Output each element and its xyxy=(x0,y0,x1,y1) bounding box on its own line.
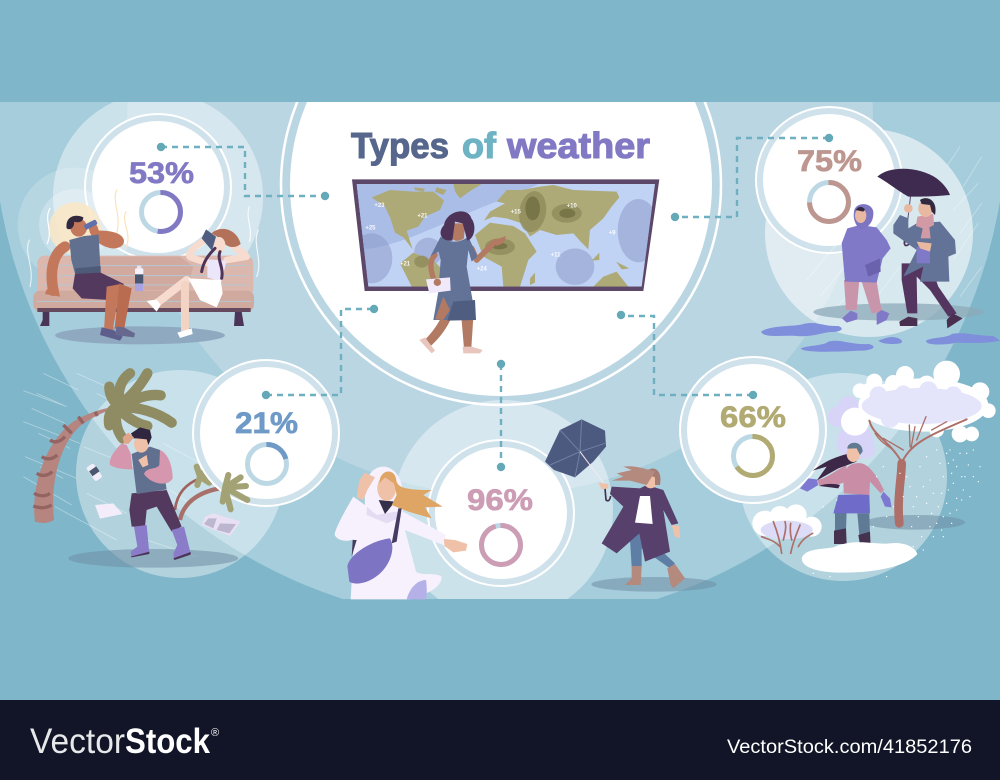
windblown bottle xyxy=(86,463,103,482)
pressure systems xyxy=(351,199,659,285)
map frame xyxy=(352,179,659,291)
map temperatures xyxy=(365,203,616,272)
small palm fronds over card xyxy=(223,475,247,509)
map temperatures: +21 xyxy=(400,261,411,267)
inverted umbrella xyxy=(545,419,611,501)
presenter xyxy=(419,211,506,353)
watermark logo: Vector xyxy=(30,722,125,761)
continents xyxy=(372,184,629,287)
snowy tree canopy xyxy=(828,361,996,460)
storm scene xyxy=(335,419,717,599)
blowing newspaper xyxy=(202,513,241,536)
card: 75 percent: 75% xyxy=(797,145,862,178)
title: weather xyxy=(506,125,650,166)
map temperatures: +25 xyxy=(365,226,376,232)
heat scene figures xyxy=(18,168,259,344)
ground shadow xyxy=(55,326,225,344)
title: of xyxy=(462,125,497,166)
water bottle xyxy=(135,266,143,291)
map temperatures: +21 xyxy=(417,213,428,219)
weather map with presenter xyxy=(340,177,673,353)
tree shadow xyxy=(865,515,965,530)
watermark logo xyxy=(30,722,219,761)
rain streaks xyxy=(807,147,982,310)
woman in white coat xyxy=(335,467,467,599)
ground shadow xyxy=(68,549,238,568)
ground shadow xyxy=(813,303,983,321)
watermark id: VectorStock.com/41852176 xyxy=(727,737,972,758)
man with umbrella xyxy=(877,169,963,328)
wind scene big palm xyxy=(23,373,241,568)
falling snow xyxy=(813,450,980,577)
watermark logo: ® xyxy=(211,727,219,739)
card: 21 percent xyxy=(193,360,339,506)
wind streaks xyxy=(23,373,207,557)
middle background layers xyxy=(0,102,1000,599)
girl in snow xyxy=(800,443,892,548)
card: 21 percent: 21% xyxy=(235,407,298,440)
card: 53 percent xyxy=(85,114,231,260)
snow mound xyxy=(802,542,917,573)
man in wind xyxy=(110,427,191,560)
map temperatures: +15 xyxy=(511,210,521,216)
dark land patches xyxy=(414,189,582,268)
woman with purple coat xyxy=(591,466,717,592)
connector lines xyxy=(161,138,829,467)
snowy bush xyxy=(752,504,822,553)
title: Types xyxy=(351,125,449,166)
tree trunk and branches xyxy=(869,417,967,523)
woman with book xyxy=(147,229,247,338)
map temperatures: +9 xyxy=(609,231,616,237)
watermark logo: Stock xyxy=(125,722,210,761)
heat glow around man xyxy=(18,168,132,282)
title xyxy=(351,125,650,166)
card: 96 percent: 96% xyxy=(467,484,533,517)
card: 66 percent: 66% xyxy=(720,401,786,434)
card: 75 percent xyxy=(756,107,902,253)
rain scene xyxy=(761,147,1000,352)
puddles xyxy=(761,323,1000,352)
heat steam xyxy=(28,190,259,287)
card: 53 percent: 53% xyxy=(129,157,194,190)
map surface xyxy=(356,184,655,287)
large palm tree xyxy=(33,373,172,523)
map temperatures: +11 xyxy=(551,252,561,258)
blowing paper xyxy=(95,503,123,519)
map temperatures: +24 xyxy=(477,266,487,272)
map temperatures: +23 xyxy=(374,203,385,209)
map temperatures: +10 xyxy=(567,203,577,209)
man drinking xyxy=(45,216,135,341)
central white circle xyxy=(280,102,722,406)
card: 66 percent xyxy=(680,357,826,503)
bench xyxy=(33,256,254,326)
snow scene xyxy=(752,361,996,577)
connector dots xyxy=(157,134,833,471)
small palms xyxy=(175,467,225,520)
hooded person xyxy=(842,204,891,325)
card: 96 percent xyxy=(428,440,574,586)
